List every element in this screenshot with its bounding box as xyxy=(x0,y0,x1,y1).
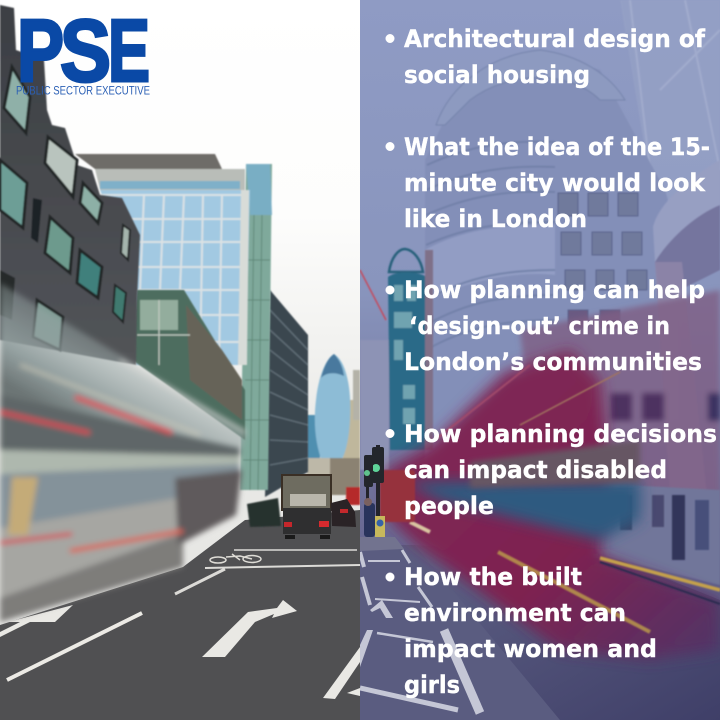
pedestrian and bollard sign xyxy=(360,498,404,551)
bullet: 15-minute city xyxy=(386,133,710,233)
logo letters xyxy=(17,1,150,100)
bullet: social housing xyxy=(386,25,706,89)
bullet: women and girls: girls xyxy=(404,671,460,699)
pavement xyxy=(602,486,720,585)
glass tower xyxy=(75,154,250,365)
bullet: disabled people: How planning decisions xyxy=(404,420,717,448)
bus window band xyxy=(405,480,640,540)
lane markings xyxy=(360,550,480,713)
bullet: social housing: social housing xyxy=(404,61,590,89)
road xyxy=(360,545,560,720)
blurred black taxi xyxy=(247,498,281,527)
bullet: disabled people xyxy=(386,420,717,520)
bullet: women and girls: impact women and xyxy=(404,635,657,663)
bicycle road symbol xyxy=(210,554,261,563)
motion-blurred bus xyxy=(0,283,248,622)
car ahead xyxy=(331,499,356,527)
truck xyxy=(282,475,331,539)
bullet: design-out crime xyxy=(386,276,705,376)
small distant red bus xyxy=(380,470,415,522)
bullet: design-out crime: How planning can help xyxy=(404,276,705,304)
logo letters: P xyxy=(17,1,64,100)
panel: street photograph xyxy=(0,0,360,720)
round glazed building xyxy=(426,50,668,443)
lower pink tinted facade xyxy=(520,290,720,500)
bullet: design-out crime: London’s communities xyxy=(404,348,702,376)
bullet: women and girls: How the built xyxy=(404,563,582,591)
bullet: disabled people: people xyxy=(404,492,494,520)
bullet: women and girls xyxy=(386,563,657,699)
bullet: women and girls: environment can xyxy=(404,599,626,627)
low glazed podium xyxy=(132,290,245,440)
dark office block xyxy=(265,290,308,497)
bullet: 15-minute city: like in London xyxy=(404,205,587,233)
teal turret tower xyxy=(360,249,433,470)
bullet: disabled people: can impact disabled xyxy=(404,456,667,484)
bullet: 15-minute city: minute city would look xyxy=(404,169,706,197)
logo strapline: PUBLIC SECTOR EXECUTIVE xyxy=(16,86,150,98)
parked vehicles xyxy=(247,475,356,539)
bullet list xyxy=(386,25,717,699)
distant skyline and Gherkin xyxy=(307,354,360,505)
bullet: design-out crime: ‘design-out’ crime in xyxy=(409,312,670,340)
canopy and pillar xyxy=(653,162,720,302)
bus streaks xyxy=(410,365,720,632)
logo: PSE xyxy=(16,1,150,100)
green glass strip xyxy=(240,164,272,490)
arrow: turn right xyxy=(202,600,297,657)
blurred red bus xyxy=(385,350,720,660)
bullet: social housing: Architectural design of xyxy=(404,25,706,53)
tall side tower xyxy=(628,0,720,162)
traffic lights xyxy=(364,445,384,516)
road surface xyxy=(0,510,360,720)
building windows xyxy=(558,193,647,328)
panel: tinted photograph xyxy=(360,0,720,720)
brick building xyxy=(0,5,140,365)
logo letters: S xyxy=(60,1,111,100)
logo letters: E xyxy=(108,1,150,100)
arrow: ahead xyxy=(0,605,73,637)
pedestrians xyxy=(620,495,709,560)
road markings xyxy=(0,550,360,699)
